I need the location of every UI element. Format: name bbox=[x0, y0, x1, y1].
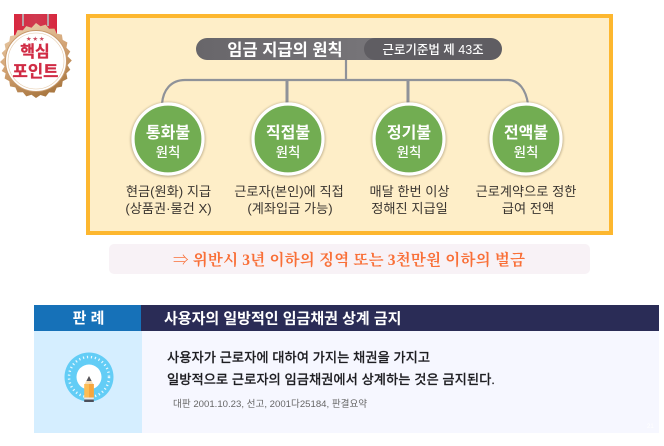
legal reference pill: 근로기준법 제 43조 bbox=[382, 43, 484, 57]
panel background bbox=[88, 16, 611, 233]
icon column bbox=[34, 331, 142, 433]
precedent text: 사용자가 근로자에 대하여 가지는 채권을 가지고 bbox=[167, 350, 430, 365]
principle: 정기불: 원칙 bbox=[397, 145, 421, 160]
precedent label header: 판 례 bbox=[73, 310, 104, 327]
title pill bbox=[196, 38, 436, 60]
principle: 통화불: 현금(원화) 지급 bbox=[126, 184, 211, 199]
principle: 정기불 bbox=[369, 102, 450, 216]
precedent body background bbox=[142, 331, 659, 433]
panel: court precedent bbox=[34, 305, 659, 433]
page number: 21 bbox=[647, 424, 654, 430]
badge text: 핵심: 핵심 bbox=[20, 42, 50, 61]
panel: wage payment principles bbox=[88, 16, 611, 233]
citation: 대판 2001.10.23, 선고, 2001다25184, 판결요약 bbox=[173, 398, 367, 410]
principle: 정기불: 정해진 지급일 bbox=[371, 201, 448, 216]
principle: 정기불: 정기불 bbox=[387, 124, 431, 142]
principle: 통화불: (상품권·물건 X) bbox=[125, 201, 212, 216]
precedent title header: 사용자의 일방적인 임금채권 상계 금지 bbox=[164, 310, 401, 328]
principle: 직접불: (계좌입금 가능) bbox=[247, 201, 333, 216]
principle: 통화불 bbox=[125, 102, 212, 216]
principle: 전액불: 전액불 bbox=[504, 124, 548, 142]
principle: 직접불: 원칙 bbox=[276, 145, 300, 160]
badge: 핵심 포인트 bbox=[0, 14, 72, 98]
principle: 직접불: 직접불 bbox=[266, 124, 310, 142]
principle: 직접불: 근로자(본인)에 직접 bbox=[234, 184, 344, 199]
precedent text: 일방적으로 근로자의 임금채권에서 상계하는 것은 금지된다. bbox=[167, 372, 495, 387]
badge text: 포인트: 포인트 bbox=[12, 62, 58, 81]
callout: penalty bbox=[109, 244, 590, 274]
icon: pencil on dial bbox=[64, 352, 114, 402]
badge seal bbox=[0, 23, 72, 98]
principle: 전액불: 원칙 bbox=[514, 145, 538, 160]
callout: penalty: ⇒ 위반시 3년 이하의 징역 또는 3천만원 이하의 벌금 bbox=[173, 250, 525, 269]
principle: 전액불: 근로계약으로 정한 bbox=[476, 184, 576, 199]
connector tree bbox=[162, 59, 528, 104]
badge ribbon bbox=[14, 14, 57, 38]
title: 임금 지급의 원칙 bbox=[227, 40, 343, 60]
principle: 통화불: 원칙 bbox=[156, 145, 180, 160]
precedent title header bbox=[141, 305, 659, 331]
legal reference pill bbox=[364, 38, 502, 60]
badge stars: ★★★ bbox=[26, 36, 46, 42]
principle: 전액불 bbox=[476, 102, 576, 216]
principle: 전액불: 급여 전액 bbox=[502, 201, 554, 216]
principle: 통화불: 통화불 bbox=[146, 124, 190, 142]
principle: 직접불 bbox=[234, 102, 344, 216]
principle: 정기불: 매달 한번 이상 bbox=[369, 184, 450, 199]
precedent label header bbox=[34, 305, 141, 331]
precedent text bbox=[167, 350, 495, 387]
